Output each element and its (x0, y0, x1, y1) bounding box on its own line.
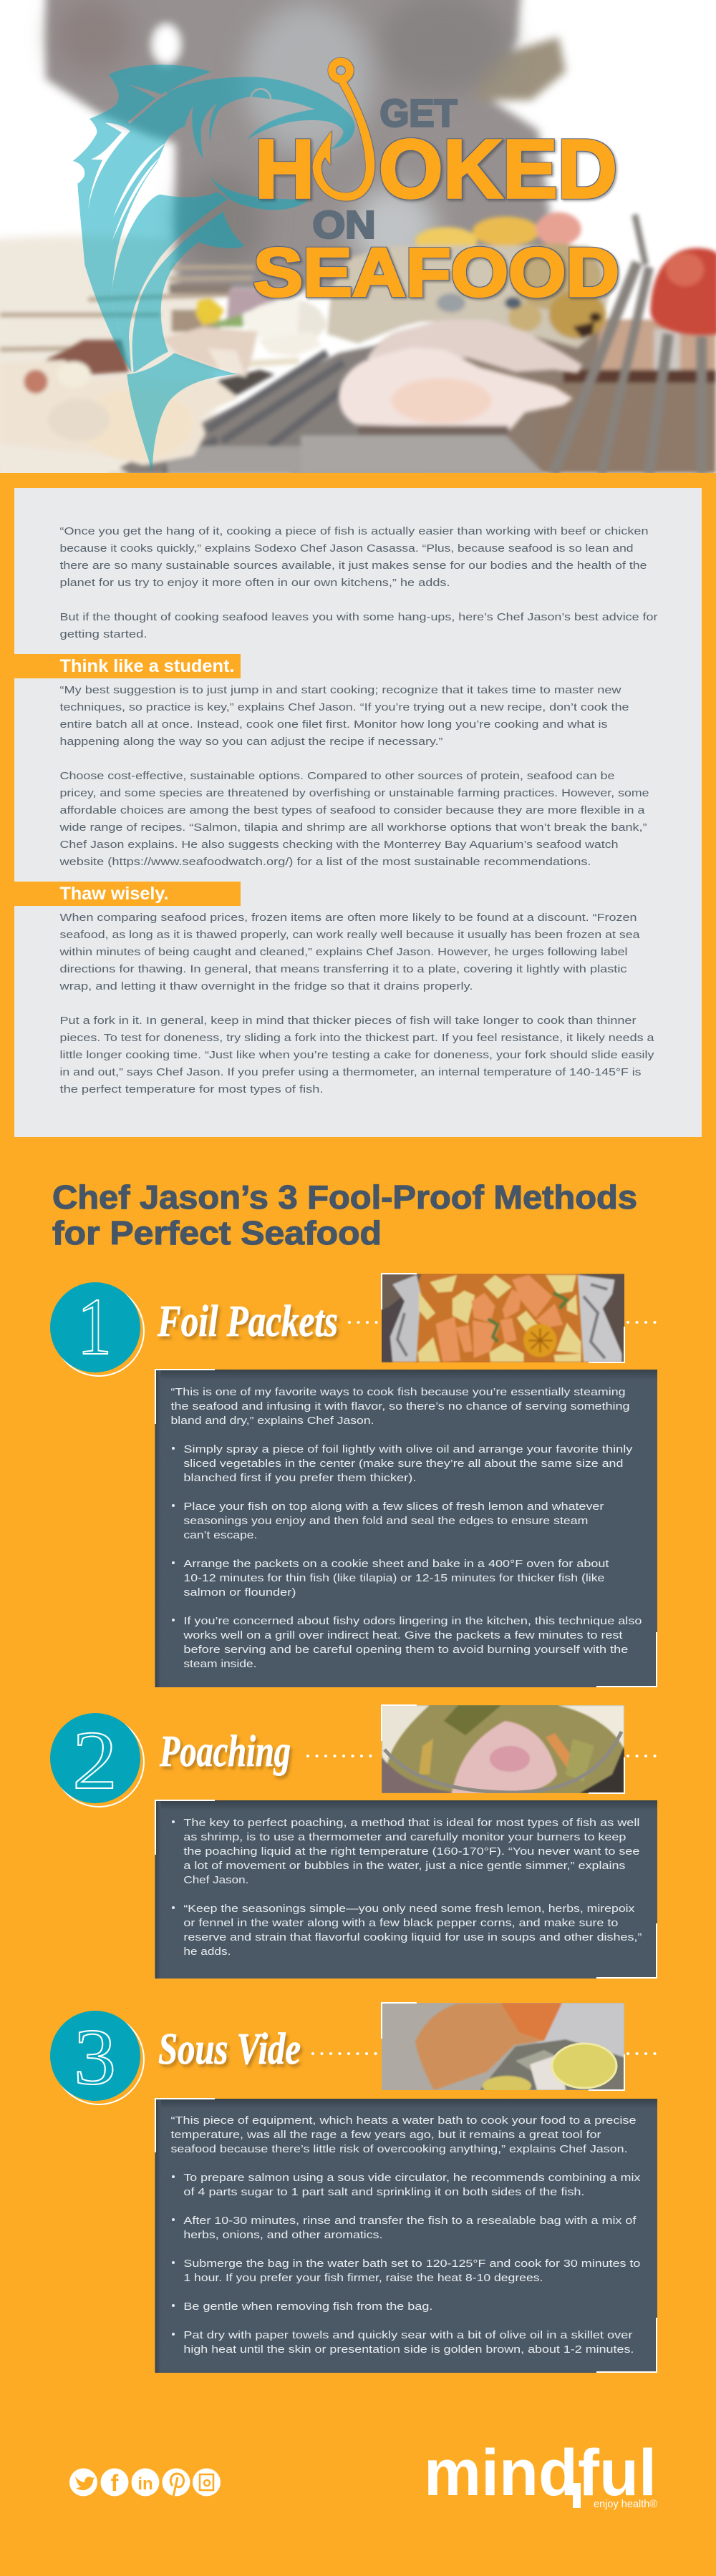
heading: chef jason's 3 fool-proof methods: for Perfect Seafood (52, 1214, 382, 1252)
title word: on: ON (312, 203, 375, 246)
bullet list: he adds. (183, 1946, 231, 1958)
corn, fish fillets, rods and tomato (right) (301, 213, 716, 474)
intro quote: seafood because there’s little risk of overcooking anything,” explains Chef Jason. (170, 2144, 627, 2155)
bullet list: herbs, onions, and other aromatics. (183, 2230, 382, 2241)
text block: intro quote: planet for us try to enjoy it more often in our own kitchens,” he adds. (60, 577, 450, 589)
hero: grilling photo (0, 0, 716, 474)
fish head (167, 77, 355, 159)
bullet list: high heat until the skin or presentation side is golden brown, about 1-2 minutes. (183, 2344, 634, 2356)
text block: think like a student (59, 684, 649, 868)
bullet list (172, 1818, 642, 1958)
photo corner accents (382, 2003, 624, 2090)
bullet list: or fennel in the water along with a few black pepper corns, and make sure to (183, 1918, 618, 1929)
heading: thaw wisely: Thaw wisely. (60, 884, 169, 904)
text block: thaw wisely: wrap, and letting it thaw overnight in the fridge so that it drains properly. (59, 980, 473, 992)
method title: foil packets: Foil Packets (157, 1297, 338, 1346)
text block: think like a student: website (https://www.seafoodwatch.org/) for a list of the most sustainable recommendations. (59, 856, 591, 868)
bullet list: The key to perfect poaching, a method that is ideal for most types of fish as well (183, 1818, 639, 1829)
text block: thaw wisely: When comparing seafood prices, frozen items are often more likely to be found at a discount. “Frozen (60, 912, 637, 924)
bullet list: can’t escape. (183, 1530, 257, 1541)
text block: thaw wisely: the perfect temperature for most types of fish. (60, 1083, 323, 1096)
bullet list: of 4 parts sugar to 1 part salt and sprinkling it on both sides of the fish. (183, 2187, 584, 2198)
bullet list: blanched first if you prefer them thicker). (183, 1473, 416, 1484)
text block: intro quote: But if the thought of cooking seafood leaves you with some hang-ups, here’s Chef Jason’s best advice for (60, 611, 657, 623)
text block: think like a student: “My best suggestion is to just jump in and start cooking; recognize that it takes time to master new (60, 684, 621, 696)
bullet list: Place your fish on top along with a few slices of fresh lemon and whatever (183, 1501, 604, 1513)
dotted connector (313, 2052, 657, 2055)
bullet list: Be gentle when removing fish from the bag. (183, 2301, 432, 2313)
number badge 1 (50, 1282, 144, 1376)
text block: intro quote (60, 525, 657, 640)
title word: get: GET (379, 92, 458, 135)
icon: facebook: f (111, 2470, 119, 2496)
text block: think like a student: affordable choices are among the best types of seafood to consider because they are more flexible in a (60, 804, 645, 816)
text block: think like a student: wide range of recipes. “Salmon, tilapia and shrimp are all workhorse options that won’t break the bank,” (59, 821, 647, 834)
section 3: sous vide (50, 2003, 657, 2373)
text block: think like a student: Chef Jason explains. He also suggests checking with the Monterrey Bay Aquarium’s seafood watch (60, 839, 619, 851)
bullet list: Chef Jason. (183, 1875, 248, 1886)
pectoral fin (112, 192, 228, 356)
text block: intro quote: “Once you get the hang of it, cooking a piece of fish is actually easier than working with beef or chicken (60, 525, 648, 537)
method title: poaching: Poaching (159, 1727, 291, 1776)
text block: intro quote: there are so many sustainable sources available, it just makes sense for our bodies and the health of the (60, 560, 647, 572)
bullet list: 10-12 minutes for thin fish (like tilapia) or 12-15 minutes for thicker fish (like (183, 1573, 604, 1584)
intro quote: temperature, was all the rage a few years ago, but it remains a great tool for (170, 2129, 601, 2141)
hero logo: teal fish (73, 64, 355, 474)
text block: thaw wisely: within minutes of being caught and cleaned,” explains Chef Jason. However, he urges following label (59, 946, 628, 958)
text block: think like a student: happening along the way so you can adjust the recipe if necessary.” (60, 736, 443, 748)
tail (127, 353, 238, 474)
text block: think like a student: entire batch all at once. Instead, cook one filet first. Monitor how long you’re cooking and what is (60, 718, 607, 731)
text block: think like a student: techniques, so practice is key,” explains Chef Jason. “If you’re trying out a new recipe, don’t cook the (60, 701, 629, 713)
logo: mindful enjoy health: mindful (424, 2436, 657, 2509)
social media icons (69, 2469, 221, 2497)
dotted connector (308, 1755, 657, 1757)
bullet list: To prepare salmon using a sous vide circulator, he recommends combining a mix (183, 2172, 641, 2184)
intro quote: “This is one of my favorite ways to cook fish because you’re essentially steaming (170, 1387, 626, 1398)
text block: intro quote: getting started. (60, 628, 147, 640)
photo corner accents (382, 1274, 624, 1362)
text block: think like a student: Choose cost-effective, sustainable options. Compared to other sources of protein, seafood can be (60, 770, 614, 782)
text block: thaw wisely (59, 912, 654, 1096)
bullet list: seasonings you enjoy and then fold and seal the edges to ensure steam (183, 1516, 588, 1527)
fish body and dorsal fin (73, 64, 211, 372)
icon: twitter (69, 2469, 97, 2496)
icon: facebook (100, 2469, 129, 2496)
bullet list: “Keep the seasonings simple—you only need some fresh lemon, herbs, mirepoix (183, 1903, 635, 1915)
heading: chef jason's 3 fool-proof methods: Chef Jason’s 3 Fool-Proof Methods (52, 1179, 637, 1216)
text panel: sous vide (155, 2099, 657, 2373)
number badge 1: 1 (77, 1282, 112, 1372)
bullet list: sliced vegetables in the center (make sure they’re all about the same size and (183, 1458, 623, 1470)
text panel: foil packets (155, 1370, 657, 1687)
bullet list: the poaching liquid at the right temperature (160-170°F). “You never want to see (183, 1846, 639, 1858)
ventral fin (132, 211, 245, 373)
section 1: foil packets (50, 1274, 657, 1687)
bullet list: If you’re concerned about fishy odors lingering in the kitchen, this technique also (183, 1616, 642, 1627)
intro quote: “This piece of equipment, which heats a water bath to cook your food to a precise (170, 2115, 636, 2127)
bullet list: 1 hour. If you prefer your fish firmer, raise the heat 8-10 degrees. (183, 2273, 543, 2284)
text block: think like a student: pricey, and some species are threatened by overfishing or unstainable farming practices. However, some (60, 787, 649, 799)
photo: foil packet salmon (381, 1274, 625, 1365)
heading: think like a student: Think like a student. (60, 656, 235, 676)
intro quote (170, 1387, 630, 1427)
number badge 2: 2 (72, 1714, 117, 1807)
bullet list: as shrimp, is to use a thermometer and carefully monitor your burners to keep (183, 1832, 626, 1843)
method title: sous vide: Sous Vide (158, 2025, 301, 2074)
icon: pinterest (162, 2469, 190, 2497)
photo: poached fish in pot (382, 1705, 624, 1795)
icon: instagram (193, 2469, 221, 2496)
heading: chef jason's 3 fool-proof methods (52, 1179, 637, 1252)
number badge 3 (50, 2011, 144, 2104)
bullet list: a lot of movement or bubbles in the water, just a nice gentle simmer,” explains (183, 1860, 625, 1872)
photo corner accents (382, 1705, 624, 1793)
bullet list: salmon or flounder) (183, 1587, 296, 1599)
text block: thaw wisely: in and out,” says Chef Jason. If you prefer using a thermometer, an internal temperature of 140-145°F is (60, 1066, 642, 1078)
grill base and coals (right) (289, 320, 716, 474)
number badge 3: 3 (74, 2014, 116, 2102)
icon: fish hook (313, 62, 374, 201)
text block: thaw wisely: Put a fork in it. In general, keep in mind that thicker pieces of fish will take longer to cook than thinner (60, 1015, 636, 1027)
intro quote: bland and dry,” explains Chef Jason. (170, 1415, 374, 1427)
panel: intro advice (14, 488, 702, 1137)
intro quote: the seafood and infusing it with flavor, so there’s no chance of serving something (170, 1401, 630, 1413)
section 2: poaching (50, 1705, 657, 1979)
photo: sous vide salmon bag (382, 2003, 624, 2096)
bullet list: Simply spray a piece of foil lightly with olive oil and arrange your favorite thinly (183, 1444, 633, 1455)
bullet list: Submerge the bag in the water bath set to 120-125°F and cook for 30 minutes to (183, 2258, 640, 2270)
bullet list: steam inside. (183, 1659, 256, 1670)
hero title: get hooked on seafood (253, 62, 619, 311)
intro quote (170, 2115, 636, 2155)
icon: linkedin: in (137, 2474, 153, 2494)
tagline: enjoy health® (594, 2498, 657, 2510)
bullet list: After 10-30 minutes, rinse and transfer the fish to a resealable bag with a mix of (183, 2215, 637, 2227)
bullet list: before serving and be careful opening them to avoid burning yourself with the (183, 1644, 628, 1656)
text block: thaw wisely: pieces. To test for doneness, try sliding a fork into the thickest part. If you feel resistance, it likely needs a (60, 1032, 654, 1044)
heading: think like a student (14, 654, 241, 678)
fish gill arc (205, 167, 308, 210)
dotted connector (349, 1321, 657, 1324)
title word: hooked: HOOKED (255, 122, 617, 215)
bullet list: works well on a grill over indirect heat. Give the packets a few minutes to rest (183, 1630, 622, 1641)
bullet list: reserve and strain that flavorful cooking liquid for use in soups and other dishes,” (183, 1932, 642, 1943)
heading: thaw wisely (14, 882, 241, 906)
bullet list (172, 2172, 641, 2356)
title word: seafood: SEAFOOD (253, 235, 619, 311)
text panel: poaching (155, 1800, 657, 1979)
text block: thaw wisely: seafood, as long as it is thawed properly, can work really well because it usually has been frozen at sea (60, 929, 640, 941)
icon: linkedin (132, 2469, 159, 2496)
number badge 2 (50, 1713, 144, 1807)
text block: thaw wisely: directions for thawing. In general, that means transferring it to a plate, covering it lightly with plastic (60, 963, 627, 975)
bullet list: Arrange the packets on a cookie sheet and bake in a 400°F oven for about (183, 1558, 609, 1570)
bullet list (172, 1444, 642, 1670)
text block: thaw wisely: little longer cooking time. “Just like when you’re testing a cake for doneness, your fork should slide easily (60, 1049, 654, 1061)
skewers, pepper, onion and rods (left) (0, 267, 422, 474)
text block: intro quote: because it cooks quickly,” explains Sodexo Chef Jason Casassa. “Plus, because seafood is so lean and (60, 542, 633, 555)
bullet list: Pat dry with paper towels and quickly sear with a bit of olive oil in a skillet over (183, 2330, 633, 2341)
